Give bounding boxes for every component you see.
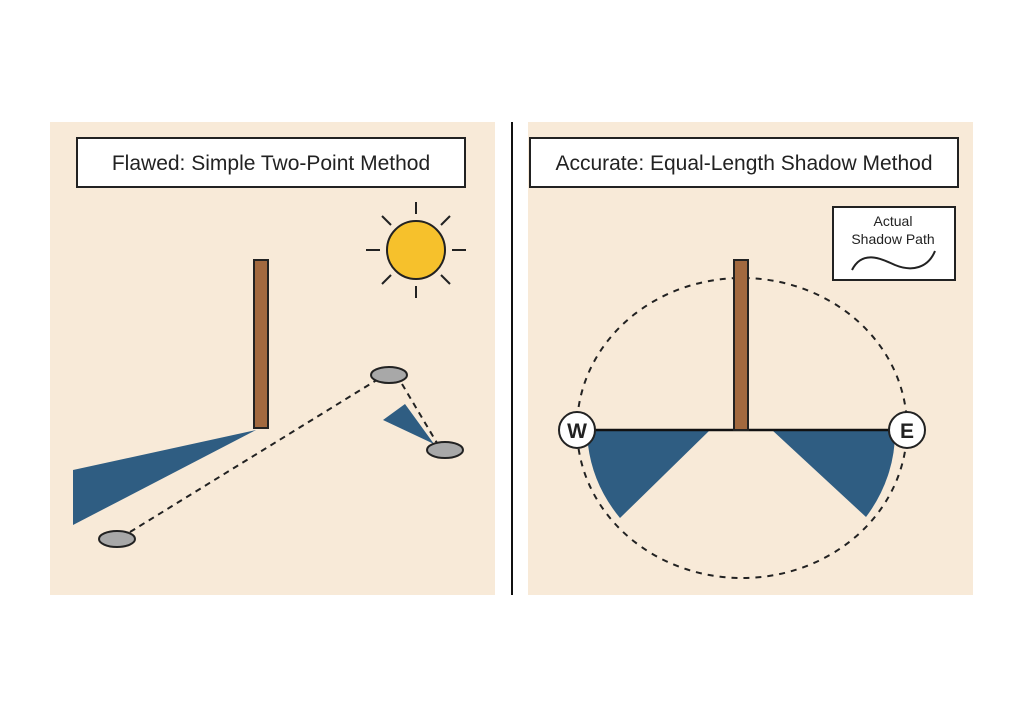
heading: flawed: Flawed: Simple Two-Point Method xyxy=(112,152,430,175)
heading: accurate: Accurate: Equal-Length Shadow Method xyxy=(555,152,933,175)
shadow: long left xyxy=(73,430,256,525)
markers: stones xyxy=(99,367,463,547)
heading: accurate xyxy=(530,138,958,187)
legend: actual shadow path: Shadow Path xyxy=(851,231,935,247)
divider xyxy=(511,122,513,595)
marker E xyxy=(889,412,925,448)
heading: flawed xyxy=(77,138,465,187)
panel: flawed method xyxy=(50,122,495,595)
legend: actual shadow path: Actual xyxy=(874,213,912,229)
dashed circle xyxy=(577,278,907,578)
icon: sun xyxy=(366,202,466,298)
dashed path xyxy=(130,378,437,532)
marker E: E xyxy=(900,420,914,443)
marker W: W xyxy=(567,420,587,443)
legend: actual shadow path xyxy=(833,207,955,280)
pole xyxy=(254,260,268,428)
marker W xyxy=(559,412,595,448)
east-west line xyxy=(590,429,892,431)
shadows: west and east xyxy=(588,430,710,518)
panel: accurate method xyxy=(528,122,973,595)
pole xyxy=(734,260,748,430)
shadow: small right xyxy=(383,404,434,444)
